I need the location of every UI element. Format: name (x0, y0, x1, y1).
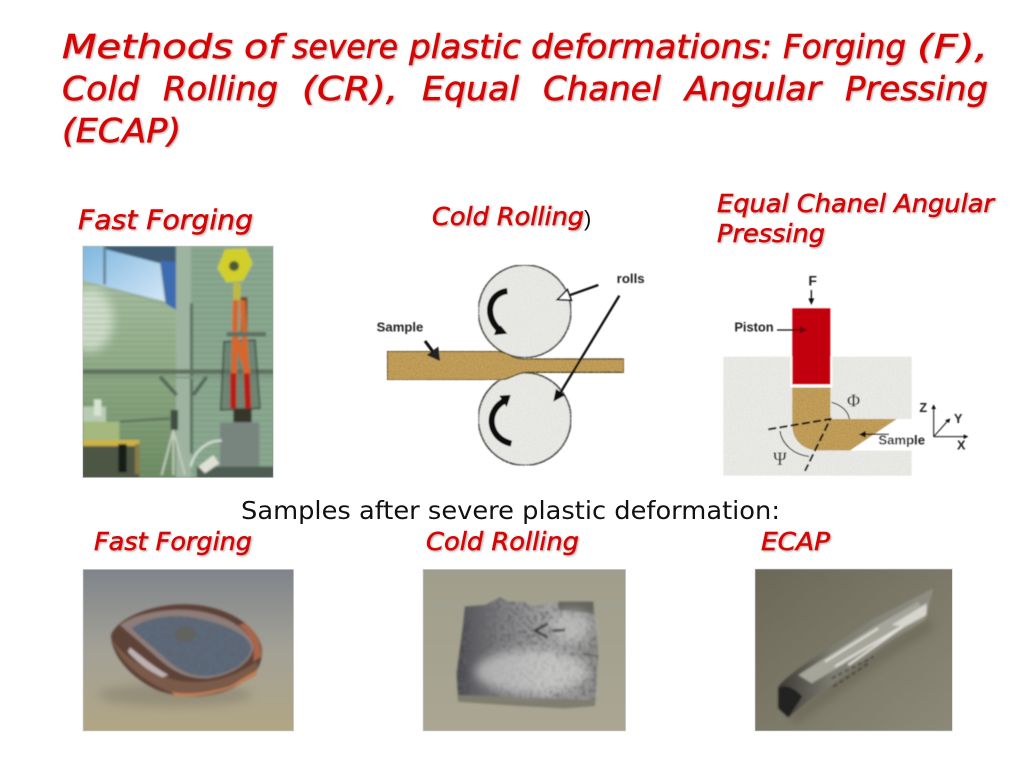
title: Pressing (845, 69, 988, 108)
title: Chanel (543, 69, 661, 108)
arrow: force (808, 290, 814, 305)
heading: Equal Chanel Angular Pressing: Pressing (717, 219, 825, 248)
arrow: sample pointer (425, 341, 440, 361)
title: Rolling (163, 69, 278, 108)
rolled sample strip (387, 351, 624, 380)
arc: phi (832, 402, 849, 419)
coordinate axes: Z (919, 401, 927, 415)
title: severe (292, 27, 398, 66)
label: Sample: Sample (878, 433, 925, 447)
label: Sample: Sample (377, 321, 423, 335)
arrow: top roll pointer (557, 285, 598, 300)
photo: fast forging machine (67, 246, 273, 478)
label: Piston: Piston (734, 321, 774, 335)
arrow: bottom roll pointer (553, 296, 619, 402)
symbol: psi: Ψ (773, 449, 787, 470)
symbol: phi: Φ (847, 390, 860, 410)
title: (F), (917, 27, 988, 66)
arc: psi (780, 431, 809, 456)
caption: samples after deformation: Samples after severe plastic deformation: (241, 496, 780, 525)
top roll (478, 265, 571, 358)
arrow: sample pointer (859, 431, 889, 438)
bottom roll (478, 373, 571, 465)
photo: rolled sheet (423, 569, 626, 731)
title: deformations: (531, 27, 772, 66)
title: plastic (408, 27, 521, 66)
title: Methods (62, 27, 233, 66)
dashed axes (768, 419, 830, 471)
title: Angular (683, 69, 824, 108)
coordinate axes: X (957, 438, 966, 452)
exit channel (850, 419, 912, 451)
piston (792, 308, 830, 384)
coordinate axes (919, 401, 968, 452)
heading: Equal Chanel Angular Pressing (717, 189, 996, 248)
photo: forged disc (83, 569, 294, 731)
title: of (244, 27, 287, 66)
label: rolls: rolls (617, 272, 645, 286)
heading: Fast Forging sample: Fast Forging (94, 527, 252, 556)
rotation arrow: bottom roll (492, 395, 511, 444)
title: (CR), (302, 69, 398, 108)
arrow: piston pointer (777, 327, 808, 333)
heading: Cold Rolling: ) (584, 206, 591, 231)
die block (723, 357, 912, 476)
heading: Fast Forging: Fast Forging (78, 205, 253, 236)
title: Equal (422, 69, 519, 108)
heading: Cold Rolling sample: Cold Rolling (426, 527, 579, 556)
photo: ECAP billet (755, 569, 952, 731)
diagram: ECAP die (723, 272, 968, 476)
heading: ECAP sample: ECAP (761, 527, 831, 556)
sample in channel (792, 388, 897, 450)
rotation arrow: top roll (490, 291, 507, 335)
label: F: F (808, 272, 817, 288)
heading: Cold Rolling: Cold Rolling (432, 202, 584, 231)
title (62, 27, 988, 150)
title: Forging (783, 27, 906, 66)
channel gap (790, 357, 832, 388)
heading: Equal Chanel Angular Pressing: Equal Chanel Angular (717, 189, 996, 218)
diagram: cold rolling (377, 265, 645, 465)
coordinate axes: Y (954, 412, 963, 426)
title: (ECAP) (62, 111, 181, 150)
title: Cold (62, 69, 140, 108)
